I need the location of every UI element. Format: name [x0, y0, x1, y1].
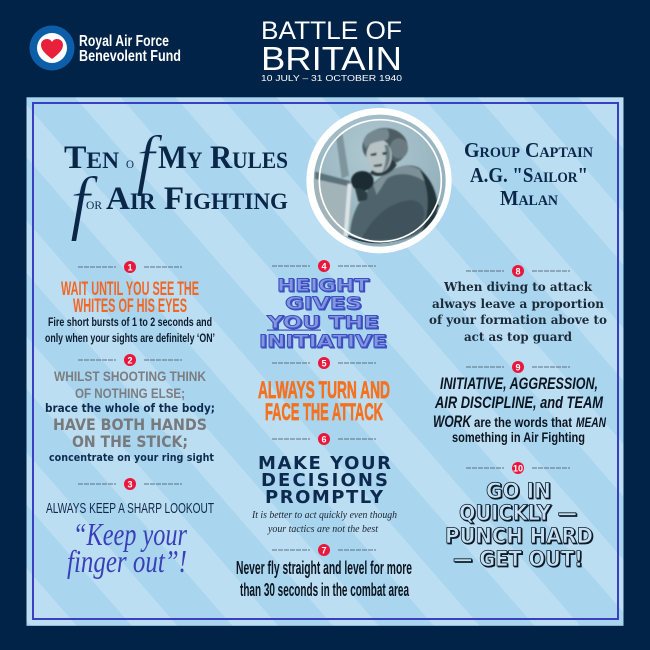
logo: RAF Benevolent Fund: [30, 26, 181, 70]
panel: striped rules panel: [26, 97, 624, 626]
rule 4: INITIATIVE: [259, 332, 387, 351]
rule 3: “Keep your: [73, 516, 187, 552]
rule 4: 4: [321, 261, 327, 271]
rule 8: [429, 265, 607, 344]
title: Ten of My Rules for Air Fighting: OR: [86, 198, 102, 212]
title: Ten of My Rules for Air Fighting: Ten: [64, 140, 119, 176]
rule 2: concentrate on your ring sight: [49, 452, 214, 464]
rule 5: [258, 357, 390, 426]
rule 9: [433, 361, 606, 445]
rule 8: 8: [515, 266, 521, 276]
group captain caption: Group Captain: [464, 138, 593, 162]
rule 6: your tactics are not the best: [267, 524, 378, 535]
rule 8: always leave a proportion: [432, 296, 604, 311]
rule 2: OF NOTHING ELSE;: [75, 385, 185, 401]
rule 6: MAKE YOUR: [258, 453, 391, 474]
heading: Battle of Britain: BATTLE OF: [261, 17, 402, 45]
rule 6: 6: [321, 434, 327, 444]
rule 9: WORK: [433, 413, 472, 431]
title: Ten of My Rules for Air Fighting: [64, 121, 288, 242]
rule 10: GO IN: [486, 479, 551, 503]
logo: RAF Benevolent Fund: Benevolent Fund: [79, 48, 181, 65]
rule 2: HAVE BOTH HANDS: [53, 415, 207, 434]
rule 9: AIR DISCIPLINE, and TEAM: [434, 394, 604, 412]
portrait: Sailor Malan: [306, 108, 452, 253]
rule 3: finger out”!: [67, 543, 187, 579]
rule 10: 10: [513, 463, 523, 473]
rule 7: than 30 seconds in the combat area: [240, 580, 410, 600]
group captain caption: [464, 138, 593, 210]
rule 2: 2: [127, 355, 133, 365]
group captain caption: A.G. "Sailor": [470, 163, 588, 187]
logo: RAF Benevolent Fund: Royal Air Force: [79, 33, 169, 50]
rule 3: ALWAYS KEEP A SHARP LOOKOUT: [46, 500, 214, 517]
rule 10: [445, 462, 593, 571]
rule 4: HEIGHT: [277, 276, 370, 295]
heading: Battle of Britain: BRITAIN: [261, 41, 402, 78]
rule 1: WHITES OF HIS EYES: [73, 296, 187, 317]
rule 7: 7: [321, 545, 327, 555]
rule 10: QUICKLY —: [459, 501, 577, 525]
rule 1: WAIT UNTIL YOU SEE THE: [61, 279, 199, 300]
rule 10: — GET OUT!: [453, 547, 583, 571]
rule 1: 1: [127, 262, 133, 272]
rule 7: Never fly straight and level for more: [236, 558, 412, 578]
rule 2: WHILST SHOOTING THINK: [54, 368, 206, 384]
title: Ten of My Rules for Air Fighting: My Rules: [158, 140, 288, 176]
rule 1: [45, 261, 215, 345]
rule 4: YOU THE: [266, 313, 379, 332]
rule 9: INITIATIVE, AGGRESSION,: [440, 375, 598, 393]
title: Ten of My Rules for Air Fighting: f: [70, 162, 99, 242]
group captain caption: Malan: [500, 186, 558, 210]
rule 6: PROMPTLY: [265, 487, 384, 508]
rule 3: [46, 478, 214, 579]
rule 3: 3: [127, 479, 133, 489]
rule 4: [259, 260, 387, 351]
rule 2: brace the whole of the body;: [45, 401, 215, 415]
rule 8: of your formation above to: [429, 312, 607, 327]
rule 8: act as top guard: [464, 329, 572, 344]
rule 2: [45, 354, 215, 464]
rule 5: 5: [321, 358, 327, 368]
rule 9: are the words that: [474, 415, 572, 430]
title: Ten of My Rules for Air Fighting: O: [126, 157, 134, 171]
rule 2: ON THE STICK;: [72, 432, 188, 451]
rule 9: something in Air Fighting: [452, 430, 585, 445]
heading: Battle of Britain: 10 JULY – 31 OCTOBER 1940: [261, 73, 402, 83]
rule 1: Fire short bursts of 1 to 2 seconds and: [48, 315, 212, 329]
rule 7: [236, 544, 412, 600]
rule 6: It is better to act quickly even though: [251, 510, 397, 521]
heading: Battle of Britain: [261, 17, 402, 83]
rule 6: DECISIONS: [261, 470, 388, 491]
rule 5: FACE THE ATTACK: [265, 399, 383, 426]
rule 9: 9: [515, 362, 521, 372]
rule 10: PUNCH HARD: [445, 524, 593, 548]
rule 9: MEAN: [576, 415, 606, 430]
rule 6: [251, 433, 397, 535]
title: Ten of My Rules for Air Fighting: Air Fighting: [106, 181, 288, 217]
photo of pilot: [312, 128, 438, 242]
rule 5: ALWAYS TURN AND: [258, 377, 390, 404]
rule 8: When diving to attack: [443, 279, 592, 294]
rule 1: only when your sights are definitely ‘ON’: [45, 331, 215, 345]
title: Ten of My Rules for Air Fighting: f: [136, 121, 163, 197]
rule 4: GIVES: [285, 294, 362, 313]
